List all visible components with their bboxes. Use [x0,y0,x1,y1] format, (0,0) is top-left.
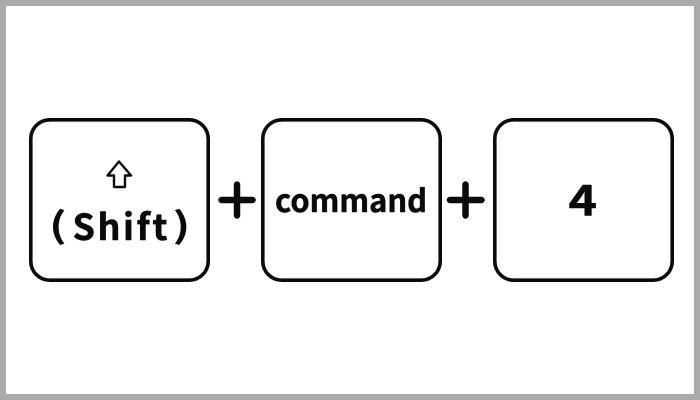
label: Shift: ) [172,198,190,248]
key: command [263,120,440,280]
label: Shift: Shift [72,199,168,251]
key: 4 [495,120,672,280]
label: 4: 4 [568,168,597,228]
label: command: command [275,176,427,221]
key: Shift [31,120,208,280]
plus sign 2 [450,184,482,216]
plus sign 1 [222,184,252,216]
label: Shift: ( [49,198,67,248]
icon: shift arrow [108,162,131,187]
label: Shift [49,198,190,251]
